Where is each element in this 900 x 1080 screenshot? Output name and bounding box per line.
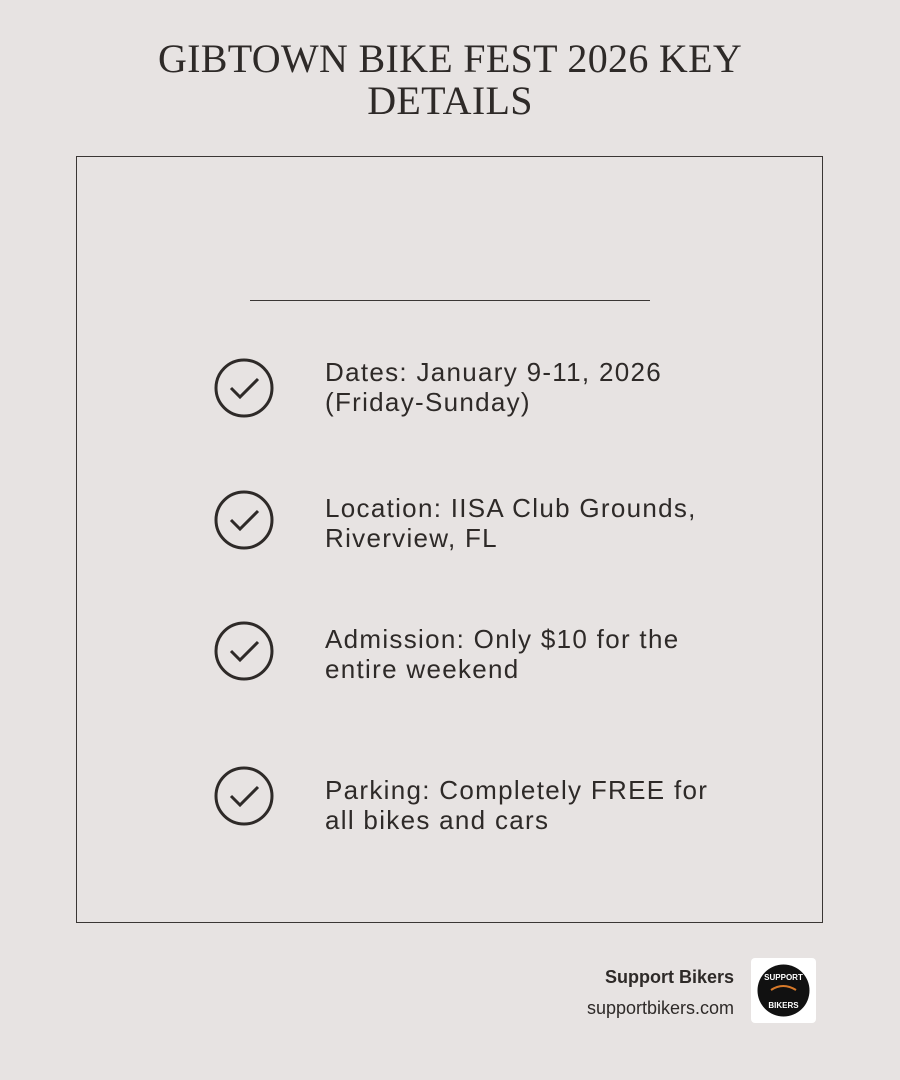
item: parking: Parking: Completely FREE for	[325, 775, 708, 805]
item: parking	[214, 766, 708, 835]
panel: key details	[76, 156, 823, 923]
icon: logo	[751, 958, 816, 1023]
title: DETAILS	[367, 78, 533, 123]
brand text: supportbikers.com	[587, 998, 734, 1018]
item: dates: Dates: January 9-11, 2026	[325, 357, 662, 387]
item: location: Location: IISA Club Grounds,	[325, 493, 697, 523]
item: admission: Admission: Only $10 for the	[325, 624, 679, 654]
item: location	[214, 490, 697, 553]
title: GIBTOWN BIKE FEST 2026 KEY	[158, 36, 742, 81]
item: location: Riverview, FL	[325, 523, 498, 553]
icon: logo: SUPPORT	[764, 973, 803, 982]
brand text: Support Bikers	[605, 967, 734, 987]
brand text	[587, 967, 734, 1018]
item: admission	[214, 622, 679, 684]
item: dates	[214, 357, 662, 418]
icon: logo: BIKERS	[768, 1001, 799, 1010]
item: admission: entire weekend	[325, 654, 520, 684]
item: parking: all bikes and cars	[325, 805, 549, 835]
title	[158, 36, 742, 123]
item: dates: (Friday-Sunday)	[325, 387, 531, 417]
